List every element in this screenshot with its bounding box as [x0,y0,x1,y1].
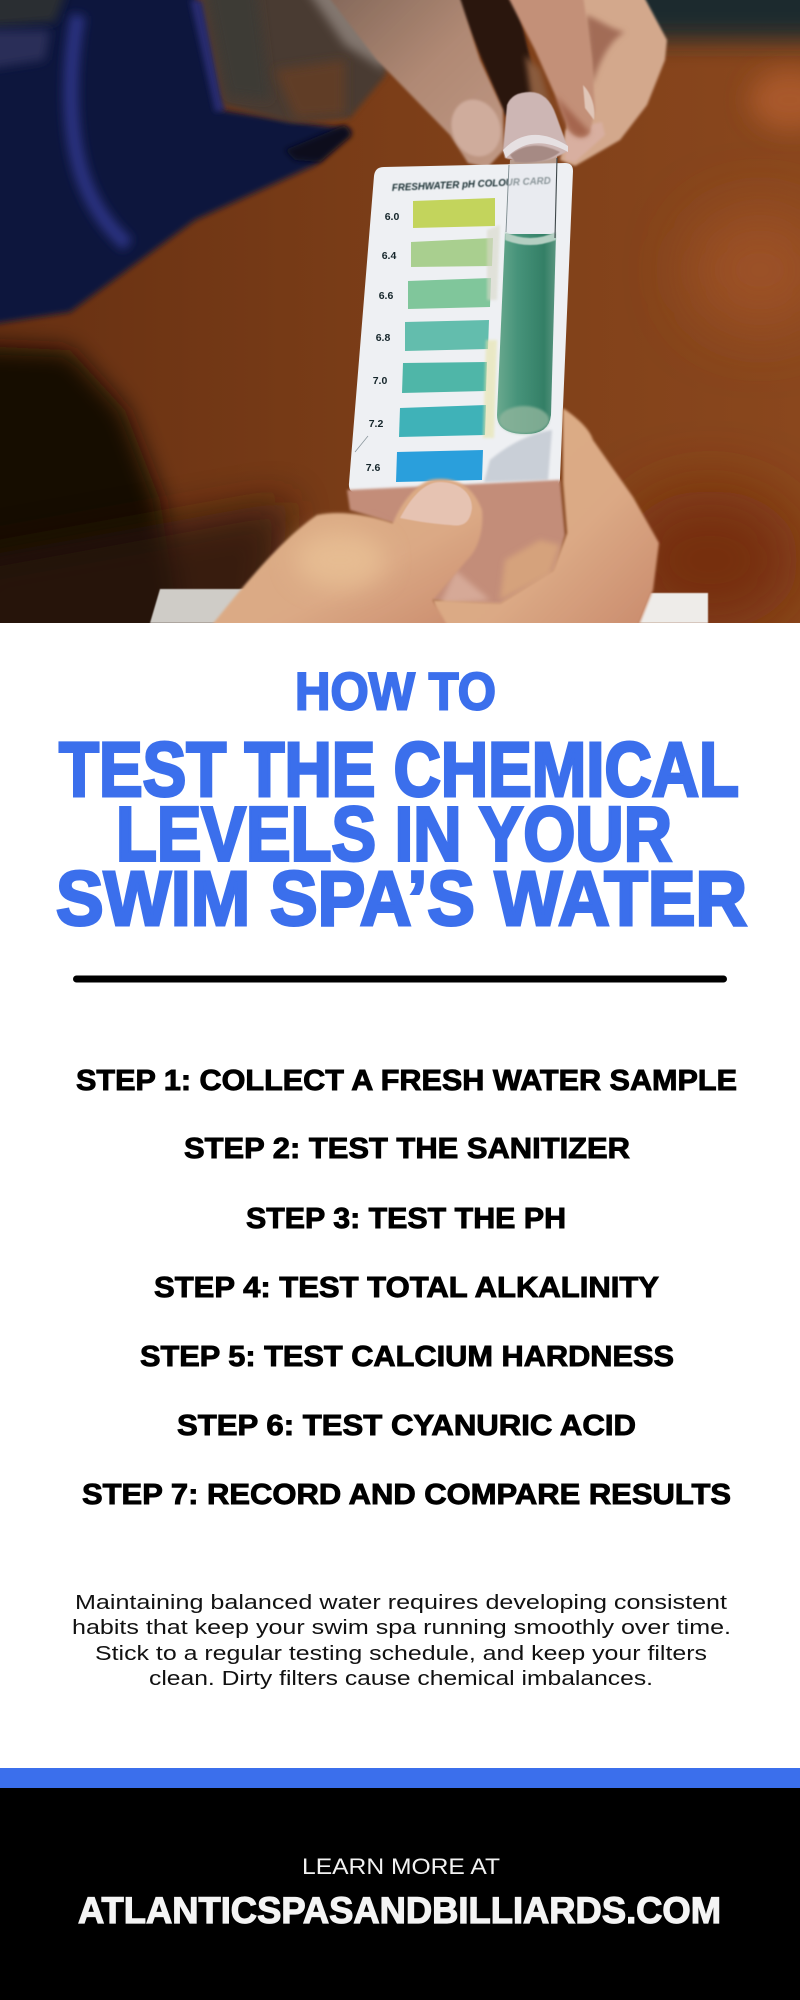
footer: website: ATLANTICSPASANDBILLIARDS.COM [78,1890,721,1931]
pH scale labels: 6.0 [385,211,399,223]
step 4: STEP 4: TEST TOTAL ALKALINITY [154,1272,659,1304]
step 3: STEP 3: TEST THE PH [246,1203,566,1235]
title: line 2: LEVELS IN YOUR [116,792,672,878]
footer [0,1788,800,2000]
closing paragraph: clean. Dirty filters cause chemical imbalances. [149,1668,653,1690]
lower hand: fingers behind card [347,480,565,605]
title: line 3: SWIM SPA’S WATER [56,856,747,942]
white paper pieces at bottom [150,589,708,623]
lower hand: palm and thumb [208,479,482,630]
top hand: index finger [507,0,595,137]
shadow: dark foreground blob lower left [0,331,178,623]
footer: learn more: LEARN MORE AT [302,1854,500,1879]
title [56,662,747,942]
photo: hands holding pH colour card and test tube [0,0,800,660]
pH scale labels: 6.8 [376,332,390,344]
closing paragraph: Stick to a regular testing schedule, and keep your filters [95,1643,707,1665]
closing paragraph: Maintaining balanced water requires developing consistent [75,1592,728,1614]
title: how to: HOW TO [295,662,496,722]
top hand: thumb [327,0,504,168]
top hand shadow [459,0,534,117]
pH scale labels: 7.6 [366,462,380,474]
lower hand: right side finger [433,408,659,630]
pH scale labels: 7.2 [369,418,383,430]
accent bar [0,1768,800,1788]
pH scale labels: 7.0 [373,375,387,387]
card heading: FRESHWATER pH COLOUR CARD [392,175,551,194]
steps list [76,1065,737,1511]
pH scale labels: 6.4 [382,250,396,262]
photo background: blurred orange-brown table [0,0,800,623]
pH scale labels: 6.6 [379,290,393,302]
closing paragraph: habits that keep your swim spa running smoothly over time. [72,1617,731,1639]
divider line [73,976,727,982]
top hand: back of hand right [560,0,667,166]
step 1: STEP 1: COLLECT A FRESH WATER SAMPLE [76,1065,737,1097]
colour swatches [396,198,495,482]
step 5: STEP 5: TEST CALCIUM HARDNESS [140,1341,674,1373]
shirt: navy sleeve upper left [0,0,352,326]
step 6: STEP 6: TEST CYANURIC ACID [177,1410,636,1442]
arm: dark wrist top centre [198,0,400,122]
test tube [497,92,568,434]
closing paragraph [72,1592,731,1690]
pH scale labels [366,211,399,474]
step 2: STEP 2: TEST THE SANITIZER [184,1133,630,1165]
colour card [349,163,573,493]
step 7: STEP 7: RECORD AND COMPARE RESULTS [82,1479,731,1511]
